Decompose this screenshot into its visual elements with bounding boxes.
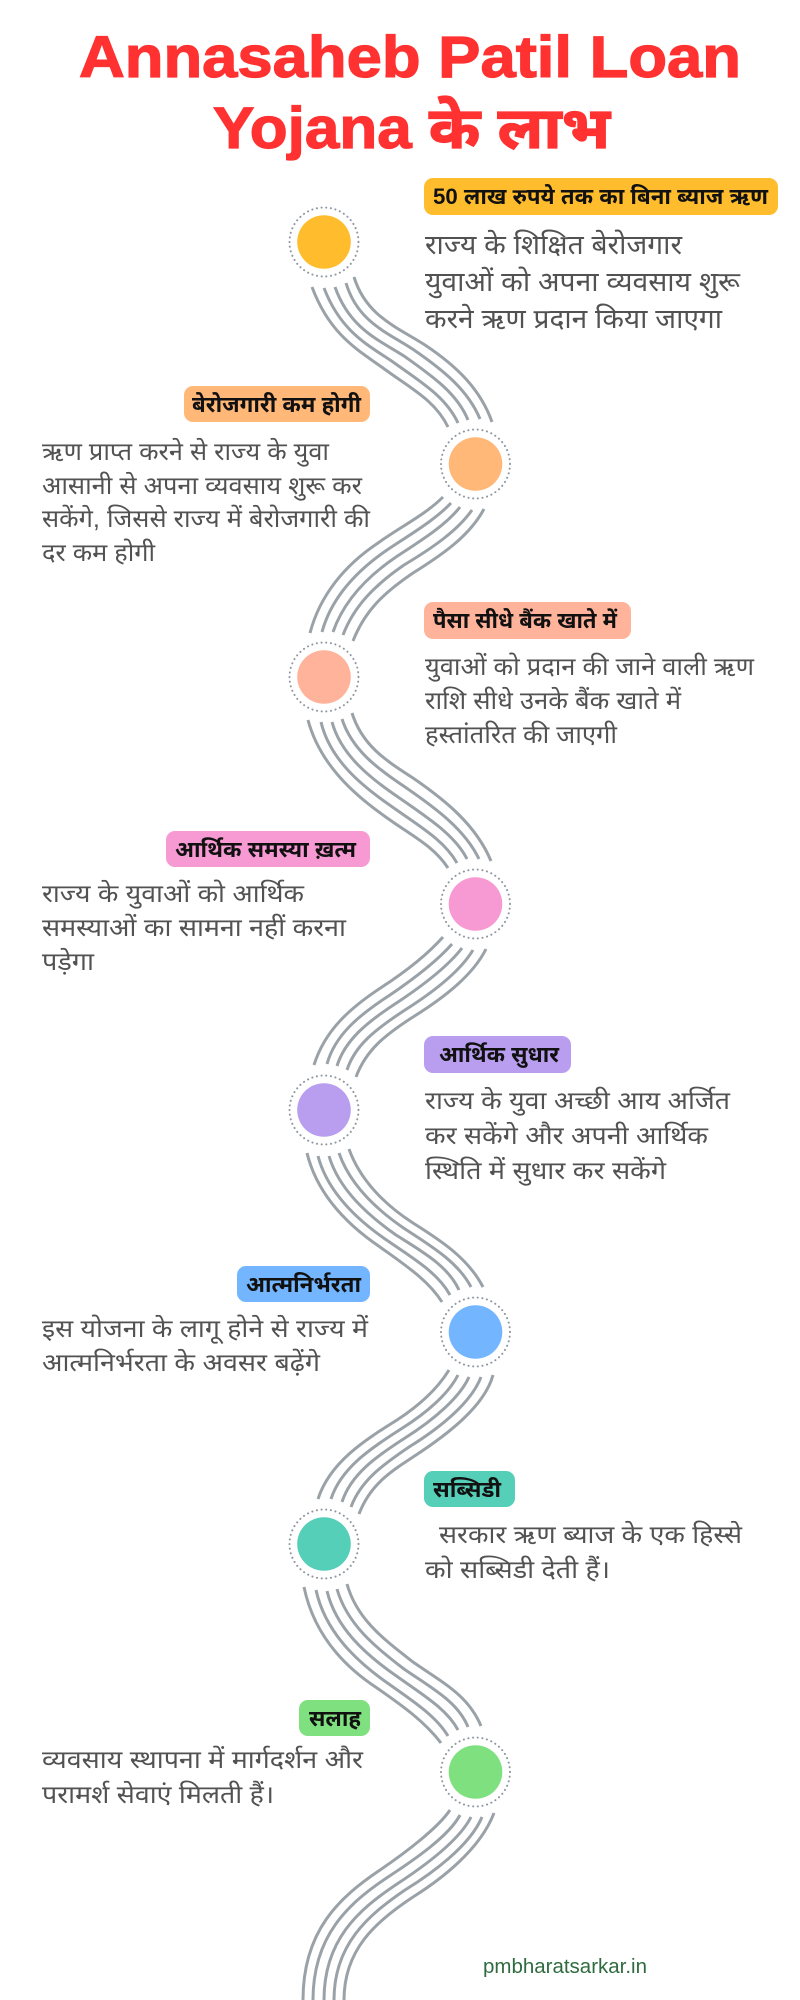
label: step 6 heading	[237, 1266, 370, 1302]
label: step 4 heading	[166, 831, 370, 867]
text: step 5 description	[425, 1085, 731, 1186]
step 4: financial problems end	[42, 831, 510, 976]
label: step 8 heading: सलाह	[309, 1706, 362, 1731]
text: step 4 description: राज्य के युवाओं को आर्थिक	[42, 878, 305, 909]
wavy connector: step 5 to 6	[307, 1149, 483, 1302]
text: step 1 description	[425, 229, 741, 334]
footer website: pmbharatsarkar.in	[483, 1956, 647, 1978]
text: step 3 description: युवाओं को प्रदान की जाने वाली ऋण	[425, 651, 755, 682]
icon: pink node	[441, 870, 510, 938]
step 6: self-reliance	[42, 1266, 510, 1377]
text: step 8 description	[42, 1745, 364, 1809]
label: step 2 heading	[184, 386, 370, 422]
step 1: 50 lakh loan	[290, 178, 778, 334]
wavy connector: step 3 to 4	[308, 713, 491, 868]
title: Annasaheb Patil Loan	[79, 25, 741, 90]
icon: green node	[441, 1738, 510, 1806]
icon: yellow node	[290, 208, 358, 276]
wavy connector: step 7 to 8	[304, 1584, 481, 1743]
wavy connector: step 2 to 3	[310, 497, 484, 641]
icon: salmon node	[290, 642, 358, 712]
label: step 5 heading: आर्थिक सुधार	[439, 1042, 560, 1068]
text: step 4 description	[42, 878, 347, 976]
text: step 6 description	[42, 1313, 369, 1377]
text: step 4 description: समस्याओं का सामना नहीं करना	[42, 913, 347, 942]
label: step 5 heading	[424, 1036, 571, 1073]
text: step 1 description: राज्य के शिक्षित बेरोजगार	[425, 229, 683, 260]
title	[79, 25, 741, 161]
text: step 8 description: परामर्श सेवाएं मिलती हैं।	[42, 1779, 274, 1809]
text: step 6 description: इस योजना के लागू होने से राज्य में	[42, 1313, 369, 1344]
text: step 7 description: सरकार ऋण ब्याज के एक हिस्से	[439, 1519, 743, 1549]
text: step 3 description: हस्तांतरित की जाएगी	[425, 720, 618, 749]
text: step 3 description: राशि सीधे उनके बैंक खाते में	[425, 685, 682, 715]
label: step 3 heading	[424, 602, 631, 639]
text: step 3 description	[425, 651, 755, 749]
label: step 1 heading	[424, 178, 778, 215]
label: step 6 heading: आत्मनिर्भरता	[246, 1272, 362, 1297]
label: step 1 heading: 50 लाख रुपये तक का बिना ब्याज ऋण	[433, 184, 769, 209]
text: step 2 description	[42, 436, 371, 567]
label: step 2 heading: बेरोजगारी कम होगी	[192, 392, 362, 417]
icon: teal node	[290, 1510, 358, 1578]
text: step 5 description: कर सकेंगे और अपनी आर्थिक	[425, 1120, 709, 1150]
text: step 5 description: स्थिति में सुधार कर सकेंगे	[425, 1155, 667, 1186]
step 5: financial improvement	[290, 1036, 731, 1186]
text: step 5 description: राज्य के युवा अच्छी आय अर्जित	[425, 1085, 731, 1116]
text: step 2 description: आसानी से अपना व्यवसाय शुरू कर	[42, 470, 363, 501]
label: step 7 heading	[424, 1471, 515, 1507]
icon: purple node	[290, 1076, 358, 1144]
step 2: unemployment reduced	[42, 386, 510, 567]
text: step 2 description: ऋण प्राप्त करने से राज्य के युवा	[42, 436, 330, 467]
icon: peach node	[441, 430, 510, 498]
step 8: advice	[42, 1700, 510, 1809]
text: step 7 description	[425, 1519, 743, 1584]
title: Yojana के लाभ	[213, 96, 612, 161]
label: step 7 heading: सब्सिडी	[433, 1477, 502, 1502]
text: step 2 description: दर कम होगी	[42, 538, 156, 567]
icon: blue node	[441, 1298, 510, 1366]
label: step 3 heading: पैसा सीधे बैंक खाते में	[433, 607, 618, 633]
text: step 6 description: आत्मनिर्भरता के अवसर बढ़ेंगे	[42, 1347, 321, 1377]
label: step 8 heading	[299, 1700, 370, 1736]
wavy connector: step 1 to 2	[312, 277, 492, 427]
text: step 2 description: सकेंगे, जिससे राज्य में बेरोजगारी की	[42, 503, 371, 533]
wavy connector: step 6 to 7	[318, 1370, 493, 1514]
label: step 4 heading: आर्थिक समस्या ख़त्म	[175, 837, 357, 862]
text: step 4 description: पड़ेगा	[42, 946, 95, 976]
step 3: money to bank account	[290, 602, 755, 749]
text: step 1 description: युवाओं को अपना व्यवसाय शुरू	[425, 266, 741, 299]
wavy connector: step 4 to 5	[314, 937, 486, 1077]
text: step 7 description: को सब्सिडी देती हैं।	[425, 1554, 610, 1584]
wavy connector: step 8 to page bottom	[303, 1810, 494, 2000]
text: step 1 description: करने ऋण प्रदान किया जाएगा	[425, 303, 723, 334]
step 7: subsidy	[290, 1471, 743, 1584]
text: step 8 description: व्यवसाय स्थापना में मार्गदर्शन और	[42, 1745, 364, 1774]
